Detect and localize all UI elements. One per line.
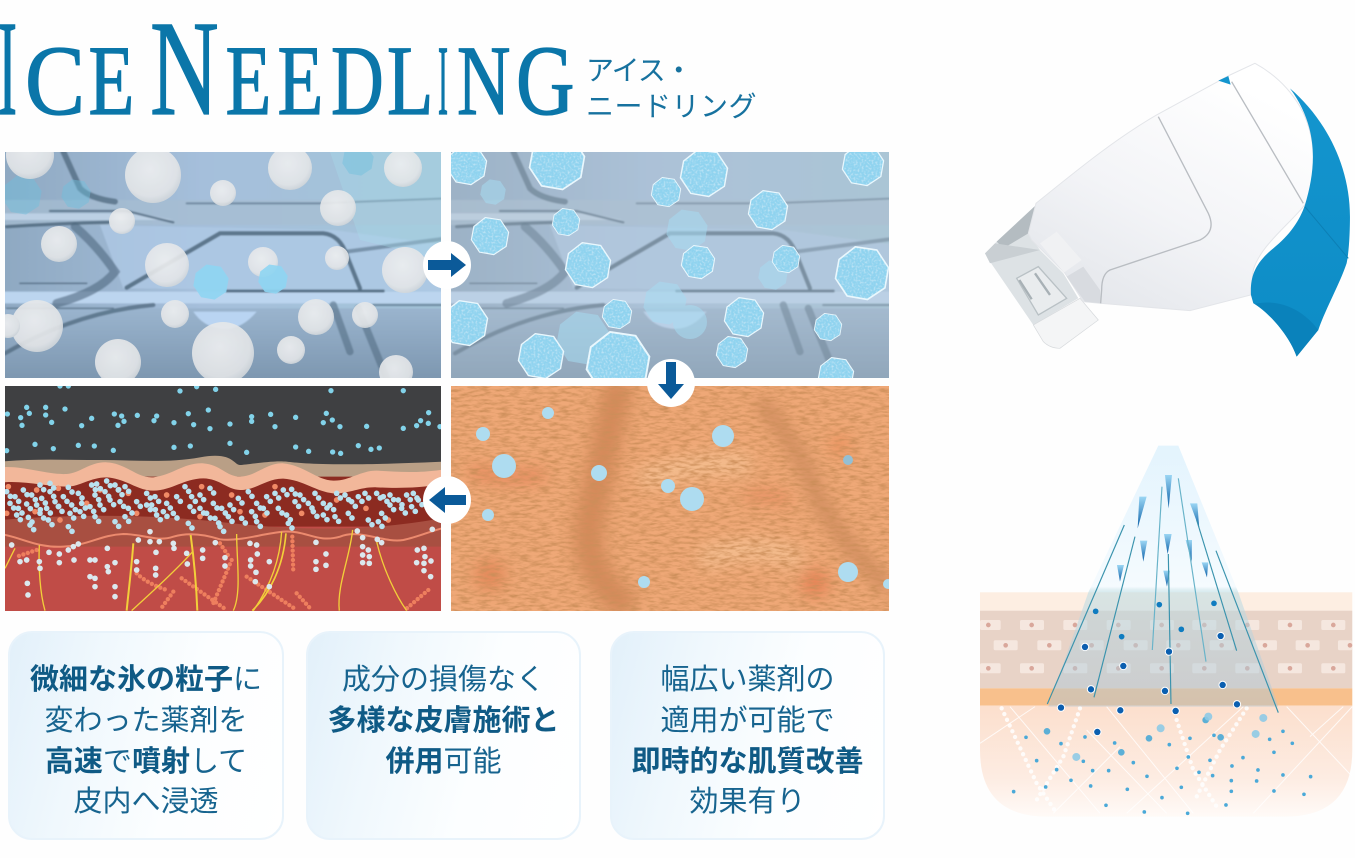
title: Ice Needling logotype: L — [387, 26, 433, 137]
body seams — [1101, 82, 1303, 303]
card: skin improvement text: 即時的な肌質改善 — [631, 746, 864, 778]
title: Ice Needling logotype: D — [331, 25, 384, 136]
panel: skin surface with absorbed particles — [451, 386, 889, 611]
title: Ice Needling logotype: N — [457, 26, 510, 137]
title: Ice Needling logotype: E — [88, 26, 134, 137]
arrow: down — [647, 359, 695, 407]
title: Ice Needling logotype: C — [25, 25, 85, 136]
card: ice particles text: 皮内へ浸透 — [73, 786, 218, 818]
panel: frozen ice particles — [451, 152, 889, 378]
dermis fibres — [980, 707, 1352, 813]
arrow: left — [423, 476, 471, 524]
blue grip — [1251, 88, 1350, 357]
panel: water droplets in nozzle — [5, 152, 441, 378]
card: ice particles text: 高速で噴射して — [45, 746, 247, 778]
card: ice particles text: 変わった薬剤を — [44, 705, 248, 737]
dermis particles — [1014, 731, 1311, 813]
skin cells — [980, 620, 1352, 673]
card: skin improvement text: 効果有り — [689, 786, 806, 818]
card: skin improvement text — [610, 631, 885, 840]
title: katakana reading — [586, 55, 757, 122]
card: ice particles text — [8, 631, 284, 840]
card: ice particles text: 微細な氷の粒子に — [30, 664, 262, 696]
skin layers — [980, 592, 1352, 817]
card: combination text: 成分の損傷なく — [342, 664, 545, 696]
card: combination text: 併用可能 — [385, 746, 502, 778]
panel: skin cross-section with particles — [5, 386, 441, 611]
spray cone — [1048, 446, 1278, 707]
title: Ice Needling logotype: I — [438, 25, 448, 136]
dark particles — [1061, 603, 1237, 732]
ice needles — [1117, 475, 1208, 587]
arrow: right — [423, 241, 471, 289]
spray streaks — [1047, 478, 1278, 713]
title: Ice Needling logotype — [0, 0, 574, 144]
title: Ice Needling logotype: E — [278, 26, 323, 137]
card: combination text — [306, 631, 581, 840]
card: combination text: 多様な皮膚施術と — [327, 705, 560, 737]
diagram: spray into skin layers — [980, 446, 1352, 817]
nozzle cartridge — [985, 206, 1098, 348]
card: skin improvement text: 適用が可能で — [660, 705, 834, 737]
device: ice needling handpiece — [985, 63, 1350, 357]
body shell — [1028, 63, 1314, 311]
title: katakana reading: ニードリング — [586, 91, 757, 122]
title: Ice Needling logotype: G — [516, 25, 574, 136]
card: skin improvement text: 幅広い薬剤の — [660, 664, 834, 696]
title: Ice Needling logotype: E — [226, 26, 271, 137]
title: katakana reading: アイス・ — [586, 55, 692, 86]
